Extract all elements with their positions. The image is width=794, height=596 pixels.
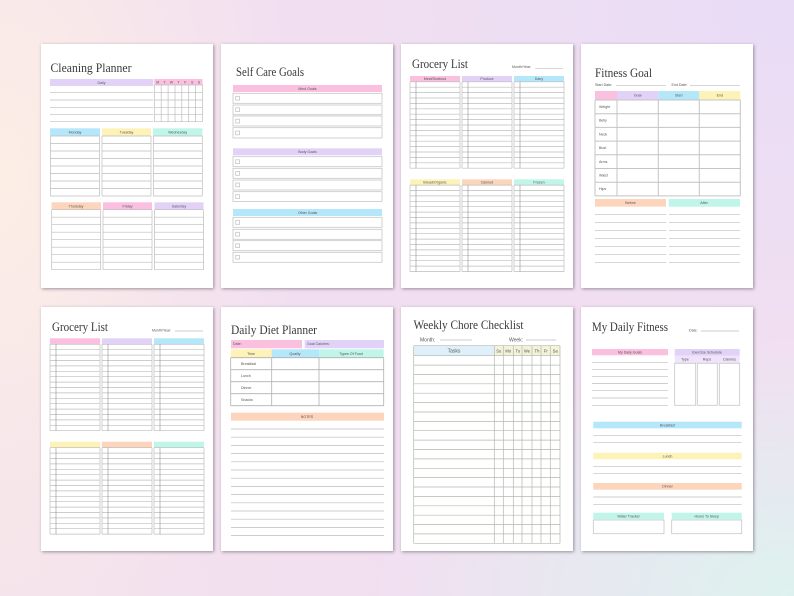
meals table: Lunch bbox=[241, 374, 251, 378]
other goals section bbox=[233, 209, 382, 262]
dairy column bbox=[514, 76, 564, 168]
produce column: Produce bbox=[480, 77, 494, 81]
tuesday column bbox=[102, 128, 151, 196]
title: my daily fitness: My Daily Fitness bbox=[592, 319, 668, 334]
exercise schedule table bbox=[675, 349, 740, 405]
panel: weekly chore checklist page bbox=[401, 307, 573, 551]
chore table: Sa bbox=[553, 348, 558, 353]
thursday column bbox=[52, 202, 101, 270]
pink column bbox=[50, 338, 100, 431]
exercise schedule table: Exercise Schedule bbox=[692, 351, 722, 355]
date field bbox=[689, 328, 739, 332]
daily checklist grid: W bbox=[170, 80, 174, 84]
bread and organic column bbox=[410, 179, 460, 272]
week field bbox=[509, 338, 556, 344]
title: self care goals: Self Care Goals bbox=[236, 64, 304, 79]
bread and organic column: Bread/Organic bbox=[423, 180, 447, 184]
month and year field: Month/Year: bbox=[152, 328, 171, 332]
notes section bbox=[231, 413, 384, 536]
panel: grocery list blank page bbox=[41, 307, 213, 551]
body goals section: Body Goals bbox=[298, 150, 317, 154]
canned column: Canned bbox=[481, 180, 493, 184]
yellow column bbox=[50, 442, 100, 534]
start and end date fields: End Date: bbox=[672, 83, 687, 87]
measurements table: Arms bbox=[599, 160, 608, 164]
month and year field bbox=[152, 328, 203, 332]
hours to sleep box: Hours To Sleep bbox=[694, 514, 719, 518]
measurements table bbox=[595, 91, 740, 196]
mind goals section: Mind Goals bbox=[298, 87, 317, 91]
water tracker box: Water Tracker bbox=[617, 514, 641, 518]
frozen column bbox=[514, 179, 564, 272]
title: weekly chore checklist: Weekly Chore Checklist bbox=[414, 317, 524, 332]
frozen column: Frozen bbox=[533, 180, 545, 184]
my daily goals section bbox=[592, 349, 668, 405]
blue column bbox=[154, 338, 204, 431]
meals table: Time bbox=[247, 352, 255, 356]
produce column bbox=[462, 76, 512, 168]
title: fitness goal: Fitness Goal bbox=[595, 65, 652, 80]
chore table: Th bbox=[535, 348, 540, 353]
measurements table: Belly bbox=[599, 119, 607, 123]
saturday column: Saturday bbox=[172, 204, 186, 208]
thursday column: Thursday bbox=[69, 204, 84, 208]
chore table: Fr bbox=[544, 348, 548, 353]
wednesday column bbox=[153, 128, 202, 196]
before section: Before bbox=[625, 201, 636, 205]
meals table: Breakfast bbox=[241, 362, 256, 366]
exercise schedule table: Calories bbox=[723, 358, 736, 362]
date field bbox=[231, 340, 302, 348]
exercise schedule table: Reps bbox=[703, 358, 711, 362]
meals table: Snacks bbox=[241, 398, 253, 402]
monday column bbox=[50, 128, 100, 196]
panel: cleaning planner page bbox=[41, 44, 213, 288]
peach column bbox=[102, 442, 152, 534]
meals table: Dinner bbox=[241, 386, 252, 390]
canned column bbox=[462, 179, 512, 272]
daily checklist grid: F bbox=[184, 80, 187, 84]
my daily goals section: My Daily Goals bbox=[618, 350, 642, 354]
friday column bbox=[103, 202, 152, 270]
lavender column bbox=[102, 338, 152, 431]
measurements table: Neck bbox=[599, 132, 607, 136]
meals table: Types Of Food bbox=[339, 352, 363, 356]
chore table: We bbox=[524, 348, 531, 353]
chore table: Tasks bbox=[448, 348, 461, 354]
chore table bbox=[414, 346, 560, 543]
meals table bbox=[231, 349, 384, 406]
body goals section bbox=[233, 148, 382, 201]
daily lines bbox=[50, 93, 153, 122]
breakfast section: Breakfast bbox=[660, 423, 675, 427]
mind goals section bbox=[233, 85, 382, 138]
measurements table: Bust bbox=[599, 146, 606, 150]
title: cleaning planner: Cleaning Planner bbox=[50, 60, 132, 75]
after section: After bbox=[700, 201, 709, 205]
measurements table: End bbox=[717, 94, 723, 98]
before section bbox=[595, 199, 666, 262]
after section bbox=[669, 199, 740, 262]
title: grocery list: Grocery List bbox=[52, 319, 108, 334]
title: daily diet planner: Daily Diet Planner bbox=[231, 322, 318, 337]
measurements table: Waist bbox=[599, 174, 608, 178]
month field bbox=[420, 338, 472, 344]
dinner section: Dinner bbox=[662, 485, 674, 489]
meals table: Quality bbox=[289, 352, 301, 356]
saturday column bbox=[154, 202, 204, 270]
chore table: Su bbox=[496, 348, 502, 353]
dinner section bbox=[593, 483, 742, 504]
other goals section: Other Goals bbox=[298, 211, 317, 215]
water tracker box bbox=[593, 513, 664, 534]
breakfast section bbox=[593, 422, 742, 443]
month field: Month: bbox=[420, 338, 435, 344]
meat and seafood column: Meat/Seafood bbox=[424, 77, 446, 81]
chore table: Tu bbox=[515, 348, 521, 353]
panel: self care goals page bbox=[221, 44, 393, 288]
goal calories field bbox=[305, 340, 384, 348]
meat and seafood column bbox=[410, 76, 460, 168]
panel: fitness goal page bbox=[581, 44, 753, 288]
week field: Week: bbox=[509, 338, 523, 344]
panel: grocery list page with categories bbox=[401, 44, 573, 288]
wednesday column: Wednesday bbox=[168, 130, 187, 134]
daily header: Daily bbox=[98, 81, 106, 85]
measurements table: Weight bbox=[599, 105, 610, 109]
hours to sleep box bbox=[672, 513, 742, 534]
daily checklist grid: S bbox=[198, 80, 201, 84]
measurements table: Goal bbox=[634, 94, 642, 98]
monday column: Monday bbox=[69, 130, 82, 134]
dairy column: Dairy bbox=[535, 77, 543, 81]
daily checklist grid bbox=[154, 79, 202, 122]
daily checklist grid: T bbox=[177, 80, 180, 84]
friday column: Friday bbox=[122, 204, 133, 208]
month and year field bbox=[512, 65, 563, 69]
panel: my daily fitness page bbox=[581, 307, 753, 551]
goal calories field: Goal Calories: bbox=[307, 342, 330, 346]
panel: daily diet planner page bbox=[221, 307, 393, 551]
start and end date fields: Start Date: bbox=[595, 83, 612, 87]
notes section: NOTES bbox=[301, 415, 314, 419]
measurements table: Hips bbox=[599, 187, 606, 191]
exercise schedule table: Type bbox=[681, 358, 689, 362]
month and year field: Month/Year: bbox=[512, 65, 531, 69]
daily header bbox=[50, 79, 153, 86]
daily checklist grid: S bbox=[191, 80, 194, 84]
start and end date fields bbox=[595, 83, 740, 87]
title: grocery list: Grocery List bbox=[412, 56, 468, 71]
lunch section: Lunch bbox=[663, 454, 672, 458]
chore table: Mo bbox=[505, 348, 512, 353]
measurements table: Start bbox=[675, 94, 683, 98]
tuesday column: Tuesday bbox=[120, 130, 134, 134]
date field: Date: bbox=[233, 342, 242, 346]
daily checklist grid: M bbox=[156, 80, 159, 84]
lunch section bbox=[593, 453, 742, 473]
date field: Date: bbox=[689, 328, 698, 332]
mint column bbox=[154, 442, 204, 534]
daily checklist grid: T bbox=[163, 80, 166, 84]
